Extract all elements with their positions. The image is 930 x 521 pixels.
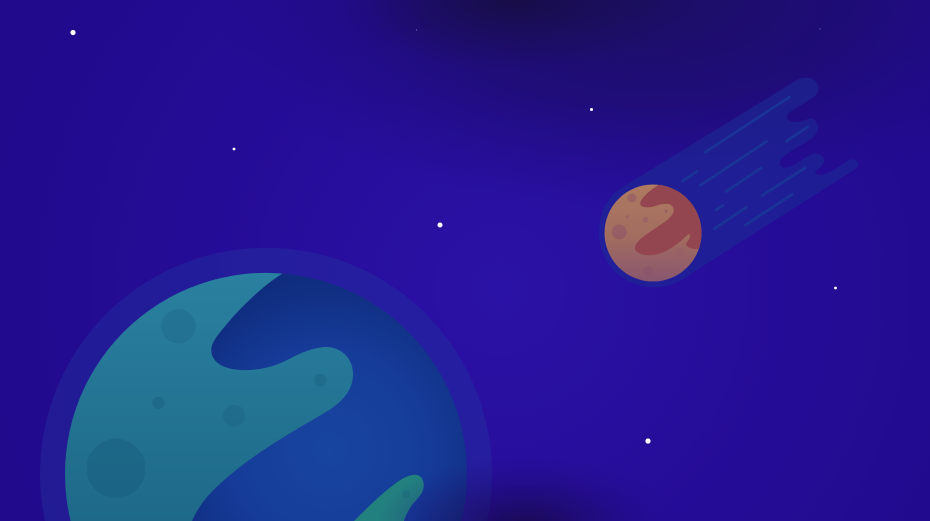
planet land masses: [60, 272, 424, 521]
planet halo: [40, 248, 492, 521]
planet ocean: [65, 273, 467, 521]
comet craters: [612, 194, 668, 240]
comet red land: [612, 184, 702, 256]
comet body: [604, 184, 702, 282]
comet tail streaks: [682, 97, 808, 229]
planet: [40, 248, 492, 521]
comet tail: [599, 78, 858, 287]
stars: [70, 28, 837, 444]
comet: [599, 78, 858, 287]
planet craters: [86, 309, 410, 498]
